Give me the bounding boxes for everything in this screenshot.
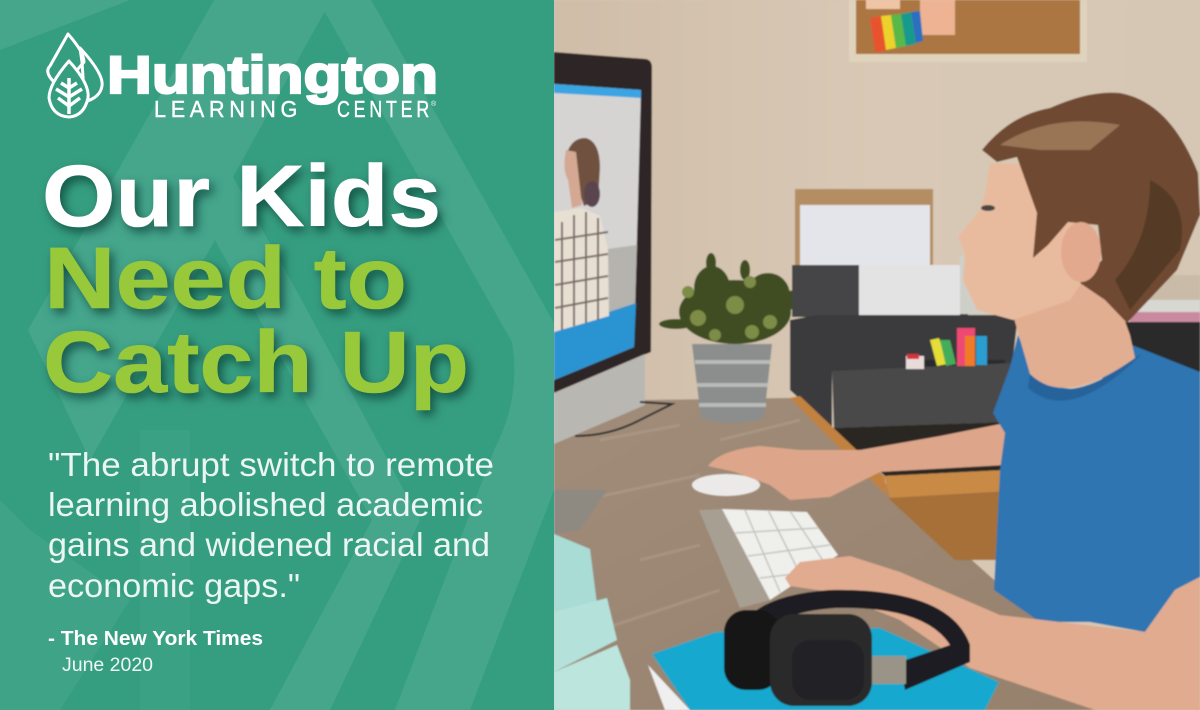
- arm and hand on mouse: [708, 422, 1010, 500]
- photo: boy at desk with computer: [554, 0, 1200, 710]
- logo sub-line: learning: LEARNING: [154, 96, 302, 122]
- boy: ear: [1061, 222, 1101, 282]
- heading line: Need to: Need to: [44, 230, 407, 327]
- corkboard: [849, 0, 1087, 62]
- shirt collar: [1028, 354, 1142, 401]
- desk: [554, 398, 1140, 710]
- plant: [659, 253, 818, 423]
- logo sub-line: center: CENTER: [337, 96, 433, 122]
- keyboard: [699, 509, 838, 608]
- heading line: Catch Up: Catch Up: [43, 314, 469, 411]
- notebook: [648, 628, 999, 710]
- mouse: [692, 474, 760, 496]
- icon: leaf and droplets: [48, 34, 102, 117]
- boy: hair: [982, 93, 1200, 323]
- quote text: [48, 446, 494, 604]
- boy: eye: [981, 205, 995, 211]
- forearm and hand on keyboard: [785, 556, 1200, 710]
- stack of books: [554, 534, 630, 710]
- headphones: [724, 590, 970, 706]
- monitor: [554, 52, 652, 444]
- heading line: Our Kids: Our Kids: [42, 148, 441, 245]
- panel: green left panel with leaf pattern: [0, 0, 554, 710]
- boy: shirt: [993, 335, 1200, 632]
- quote text: gains and widened racial and: [48, 526, 490, 563]
- registered mark: ®: [431, 100, 437, 108]
- photo backing: [554, 0, 1200, 710]
- boy: neck: [1013, 280, 1135, 388]
- attribution: - The New York Times: [48, 628, 263, 650]
- boy: face: [958, 163, 1090, 320]
- wall: [554, 0, 1200, 710]
- organizer tray with papers and markers: [790, 189, 1018, 560]
- logo: [48, 34, 438, 122]
- quote text: economic gaps.": [48, 567, 300, 604]
- date: June 2020: [62, 655, 153, 676]
- logo wordmark: Huntington: [107, 46, 438, 105]
- quote text: "The abrupt switch to remote: [48, 446, 494, 483]
- shelf items at right: [1120, 275, 1200, 392]
- text overlay on left panel: [42, 32, 494, 676]
- quote text: learning abolished academic: [48, 486, 483, 523]
